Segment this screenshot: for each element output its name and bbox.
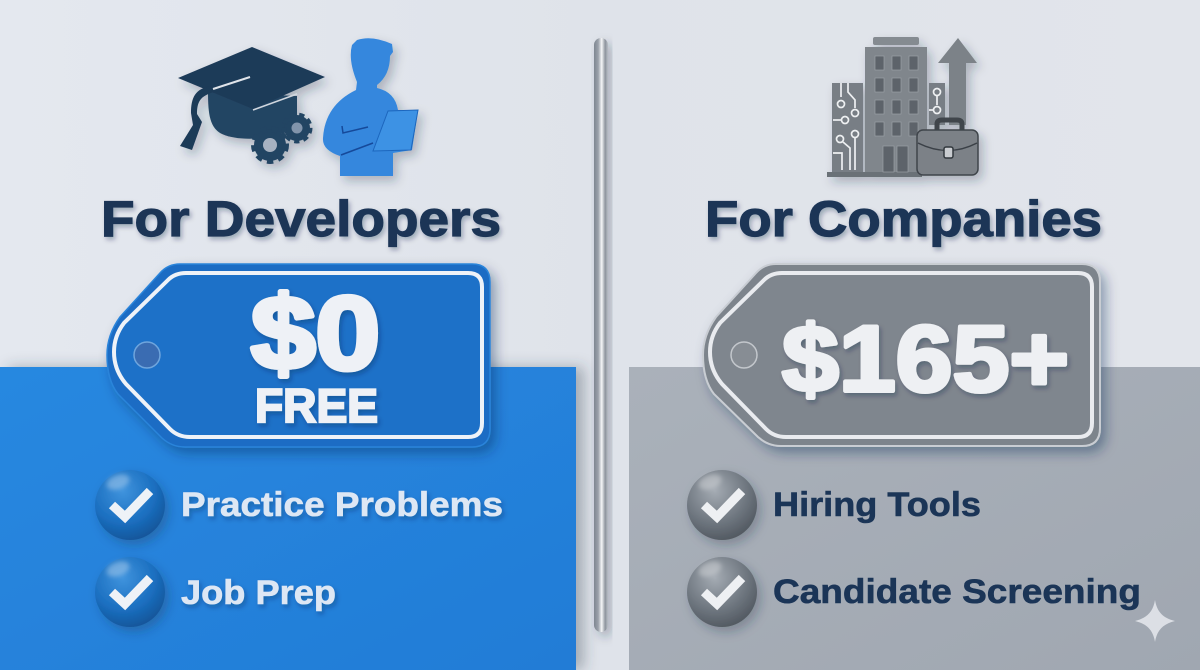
tag hole: [134, 342, 160, 368]
divider rod: [594, 38, 608, 632]
price: $165+: $165+: [782, 306, 1069, 411]
price tag: developers: [107, 264, 490, 447]
heading: For Developers: For Developers: [101, 191, 501, 247]
price: $0: $0: [251, 276, 380, 392]
list item: Job Prep: Job Prep: [181, 574, 336, 612]
panel: companies base: [629, 367, 1200, 670]
price tag: companies: [703, 264, 1100, 446]
label: FREE: FREE: [255, 379, 378, 432]
icon: building with briefcase and arrow: [827, 37, 978, 177]
list item: Candidate Screening: [687, 557, 1141, 627]
list item: Hiring Tools: [687, 470, 981, 540]
list item: Practice Problems: Practice Problems: [181, 486, 503, 524]
panel: developers base: [0, 367, 576, 670]
list item: Hiring Tools: Hiring Tools: [773, 486, 981, 524]
icon: sparkle: [1135, 600, 1175, 642]
list item: Candidate Screening: Candidate Screening: [773, 573, 1141, 611]
list item: Job Prep: [95, 557, 336, 627]
tag hole: [731, 342, 757, 368]
icon: graduation cap with gears: [178, 47, 325, 161]
icon: person with tablet: [323, 38, 418, 176]
list item: Practice Problems: [95, 470, 503, 540]
heading: For Companies: For Companies: [705, 191, 1102, 247]
